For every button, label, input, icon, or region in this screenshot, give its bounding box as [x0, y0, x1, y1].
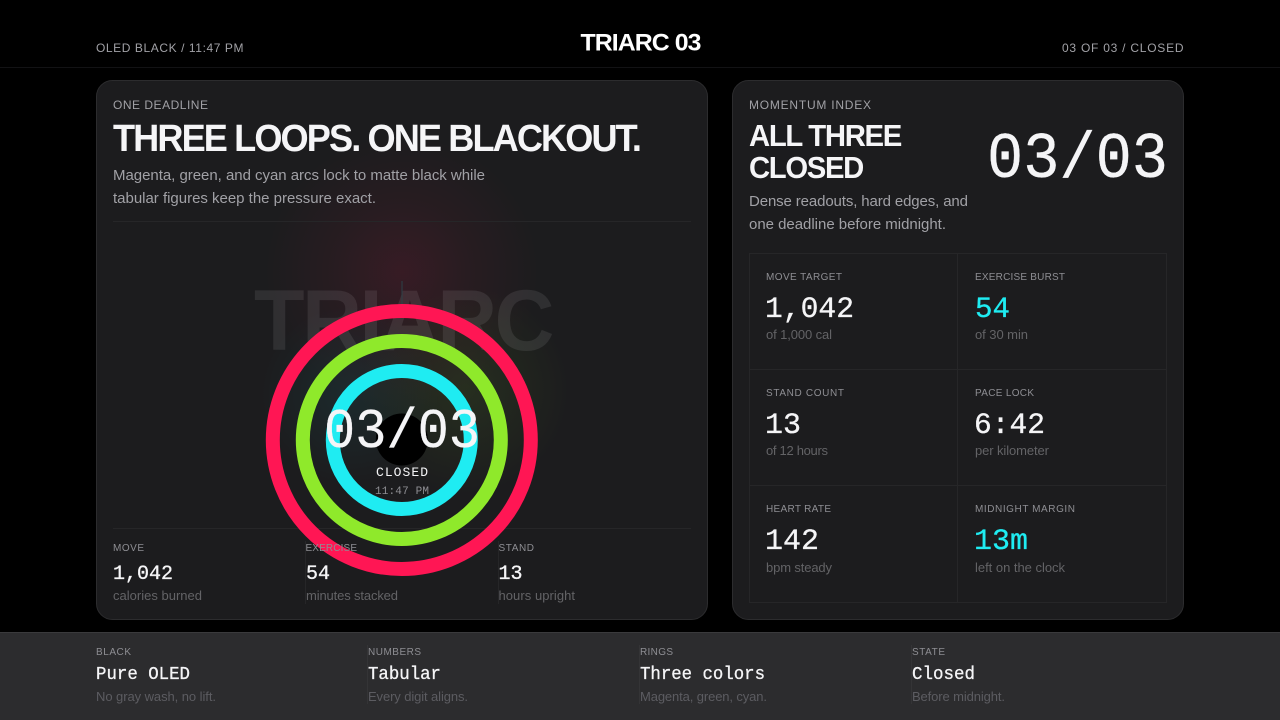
cell: pace lock: 6:42: [974, 409, 1045, 443]
description: tabular figures keep the pressure exact.: [113, 190, 376, 207]
stat: exercise: [306, 543, 398, 603]
panel: momentum index: [732, 80, 1184, 620]
footer: rings: Magenta, green, cyan.: [640, 689, 767, 704]
cell: stand count: of 12 hours: [766, 443, 828, 458]
footer: numbers: NUMBERS: [368, 647, 421, 658]
black core: [376, 414, 428, 466]
stat: move: calories burned: [113, 588, 202, 603]
footer: black: BLACK: [96, 647, 131, 658]
header bar: [0, 30, 1280, 68]
footer: rings: RINGS: [640, 647, 673, 658]
eyebrow: MOMENTUM INDEX: [749, 98, 871, 112]
cell: midnight margin: 13m: [974, 525, 1028, 559]
cell: move target: 1,042: [765, 293, 854, 327]
glow behind rings: [255, 132, 572, 497]
headline: [749, 118, 902, 185]
green ring: [303, 341, 501, 539]
right panel background: [732, 80, 1184, 620]
cell: heart rate: HEART RATE: [766, 504, 831, 515]
stat: stand: [498, 543, 575, 603]
footer: rings: [640, 647, 767, 704]
stat: stand: 13: [498, 563, 522, 586]
ring chart: [273, 281, 531, 569]
ring count: 03/03: [324, 400, 480, 464]
cell: move target: of 1,000 cal: [766, 327, 832, 342]
cell: stand count: STAND COUNT: [766, 388, 844, 399]
header right status: 03 OF 03 / CLOSED: [1062, 41, 1184, 55]
cell: midnight margin: MIDNIGHT MARGIN: [975, 504, 1075, 515]
cell: move target: [765, 272, 854, 342]
footer strip: [0, 632, 1280, 720]
headline: ALL THREE: [749, 118, 902, 153]
big index number: 03/03: [987, 123, 1168, 197]
cell: pace lock: [974, 388, 1050, 458]
stat: exercise: EXERCISE: [306, 543, 357, 554]
footer: black: [96, 647, 216, 704]
footer: numbers: Every digit aligns.: [368, 689, 468, 704]
stat: stand: STAND: [498, 543, 534, 554]
stat: move: 1,042: [113, 563, 173, 586]
footer: black: Pure OLED: [96, 665, 190, 685]
cell: midnight margin: [974, 504, 1075, 575]
tick mark: [401, 281, 403, 307]
cell: heart rate: [765, 504, 832, 575]
cyan ring: [333, 371, 471, 509]
left panel background: [96, 80, 708, 620]
footer: state: Before midnight.: [912, 689, 1005, 704]
headline: CLOSED: [749, 150, 864, 185]
footer background: [0, 632, 1280, 720]
headline: THREE LOOPS. ONE BLACKOUT.: [113, 118, 640, 160]
footer: black: No gray wash, no lift.: [96, 689, 216, 704]
footer: numbers: [368, 647, 468, 704]
ring state: CLOSED: [376, 465, 428, 480]
footer: rings: Three colors: [640, 665, 765, 685]
description: [113, 167, 485, 207]
stat: move: [113, 543, 202, 603]
cell: exercise burst: 54: [975, 293, 1010, 327]
header left status: OLED BLACK / 11:47 PM: [96, 41, 244, 55]
footer: numbers: Tabular: [368, 665, 441, 685]
stat: exercise: 54: [306, 563, 330, 586]
panel: one deadline: [96, 80, 708, 620]
stat: exercise: minutes stacked: [306, 588, 398, 603]
cell: pace lock: per kilometer: [975, 443, 1050, 458]
footer: state: STATE: [912, 647, 945, 658]
cell: stand count: [765, 388, 844, 458]
stat: move: MOVE: [113, 543, 144, 554]
magenta ring: [273, 311, 531, 569]
cell: heart rate: bpm steady: [766, 560, 832, 575]
description: [749, 193, 968, 233]
description: Magenta, green, and cyan arcs lock to matte black while: [113, 167, 485, 184]
footer: state: [912, 647, 1005, 704]
cell: exercise burst: EXERCISE BURST: [975, 272, 1065, 283]
cell: move target: MOVE TARGET: [766, 272, 842, 283]
description: one deadline before midnight.: [749, 216, 946, 233]
stat: stand: hours upright: [498, 588, 575, 603]
title: TRIARC 03: [580, 30, 701, 56]
ring time: 11:47 PM: [375, 486, 429, 498]
description: Dense readouts, hard edges, and: [749, 193, 968, 210]
cell: stand count: 13: [765, 409, 801, 443]
ghost wordmark: TRIARC: [254, 273, 552, 369]
footer: state: Closed: [912, 665, 975, 685]
readout grid: [750, 253, 1166, 602]
cell: heart rate: 142: [765, 525, 819, 559]
eyebrow: ONE DEADLINE: [113, 98, 208, 112]
cell: pace lock: PACE LOCK: [975, 388, 1034, 399]
cell: exercise burst: of 30 min: [975, 327, 1028, 342]
stat row: [113, 541, 575, 604]
cell: exercise burst: [975, 272, 1065, 342]
cell: midnight margin: left on the clock: [975, 560, 1066, 575]
